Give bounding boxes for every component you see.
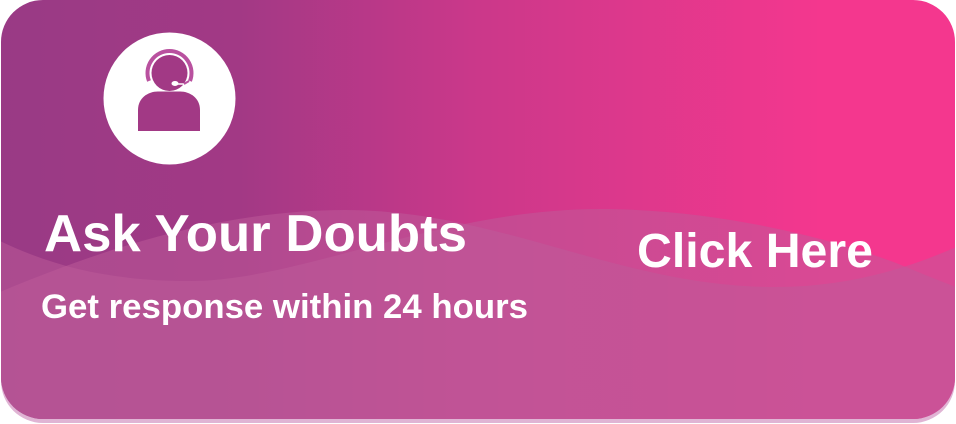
- icon: support agent: [104, 32, 236, 164]
- headset band: [148, 51, 192, 81]
- call to action: Click Here: [637, 224, 873, 278]
- title: Ask Your Doubts: [44, 205, 467, 263]
- agent head: [152, 55, 188, 91]
- agent body: [138, 92, 200, 131]
- wave: lower layer: [0, 209, 956, 424]
- headset mic boom: [178, 83, 184, 85]
- subtitle: Get response within 24 hours: [41, 288, 528, 326]
- headset mic arm: [184, 81, 189, 84]
- icon circle: [104, 32, 236, 164]
- mic tip: [172, 81, 178, 86]
- wave: upper layer: [0, 210, 956, 424]
